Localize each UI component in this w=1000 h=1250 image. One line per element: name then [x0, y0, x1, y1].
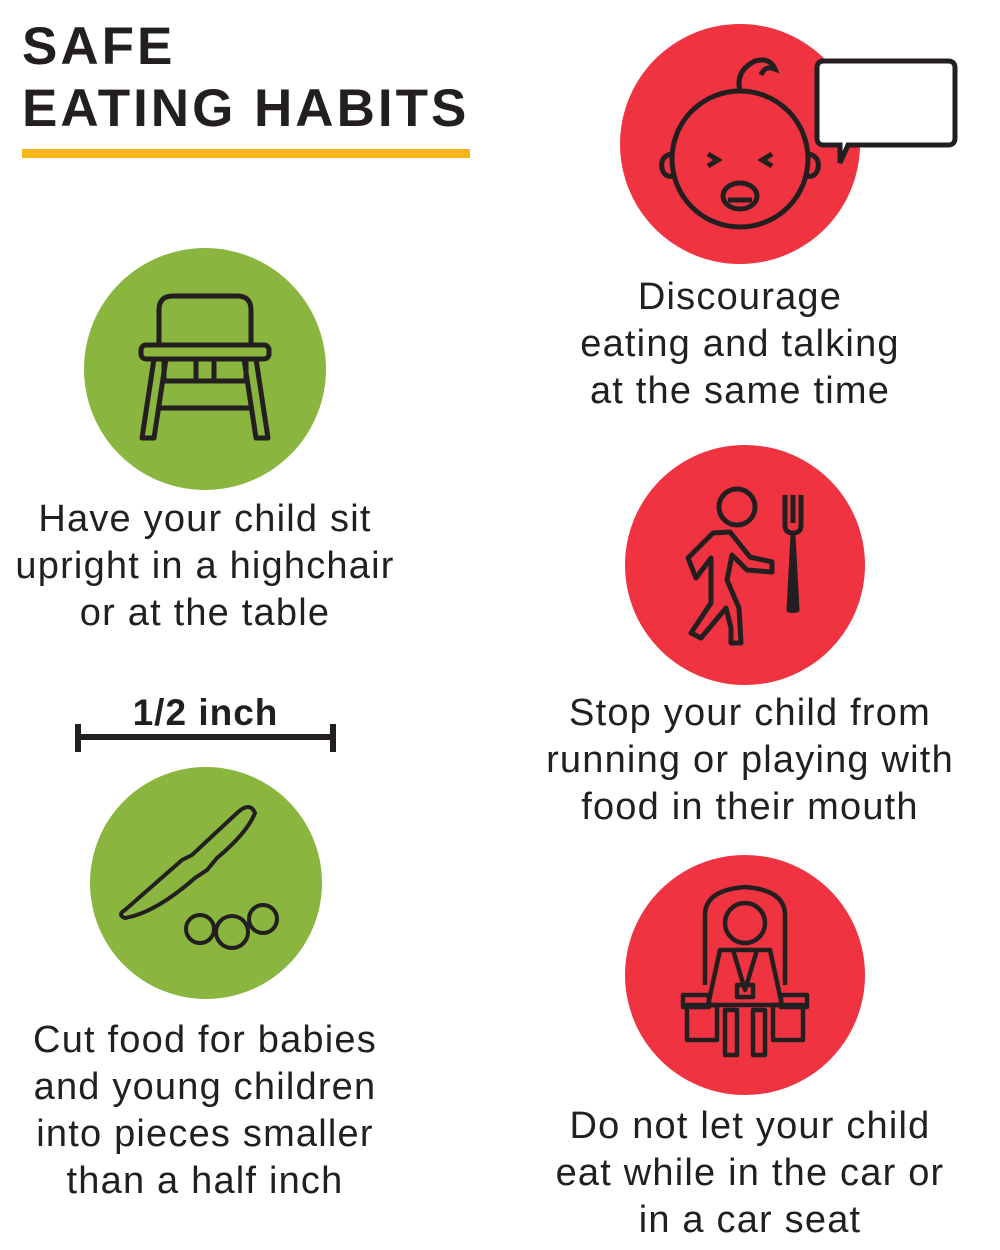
label: half inch: 1/2 inch	[133, 692, 278, 733]
text: running: Stop your child from	[569, 692, 931, 734]
panel: talking	[580, 24, 958, 412]
icon: speech bubble	[814, 58, 958, 164]
text: highchair: Have your child sit	[38, 498, 372, 540]
icon: car seat	[625, 855, 865, 1095]
text: car seat: in a car seat	[639, 1199, 861, 1241]
text: cut food: into pieces smaller	[36, 1113, 374, 1155]
text: car seat: Do not let your child	[569, 1105, 931, 1147]
icon: crying baby	[620, 24, 860, 264]
text: cut food: Cut food for babies	[33, 1019, 377, 1061]
text: cut food: and young children	[34, 1066, 376, 1108]
title	[22, 17, 469, 138]
icon: running child with fork	[625, 445, 865, 685]
panel: cut food	[33, 692, 377, 1202]
text: highchair	[15, 498, 395, 634]
icon: knife and food pieces	[90, 767, 322, 999]
text: car seat	[556, 1105, 944, 1241]
text: running	[546, 692, 954, 828]
title underline	[22, 149, 470, 158]
title: EATING HABITS	[22, 79, 469, 138]
text: highchair: or at the table	[80, 592, 330, 634]
text: talking: eating and talking	[580, 323, 900, 365]
text: running: running or playing with	[546, 739, 954, 781]
text: talking: Discourage	[638, 276, 842, 318]
text: talking: at the same time	[590, 370, 890, 412]
title: SAFE	[22, 17, 175, 76]
measure bar	[75, 724, 336, 752]
panel: highchair	[15, 248, 395, 634]
text: car seat: eat while in the car or	[556, 1152, 944, 1194]
text: highchair: upright in a highchair	[15, 545, 395, 587]
text: cut food: than a half inch	[67, 1160, 343, 1202]
icon: highchair	[84, 248, 326, 490]
text: running: food in their mouth	[581, 786, 919, 828]
text: cut food	[33, 1019, 377, 1202]
text: talking	[580, 276, 900, 412]
panel: car seat	[556, 855, 944, 1241]
panel: running	[546, 445, 954, 828]
